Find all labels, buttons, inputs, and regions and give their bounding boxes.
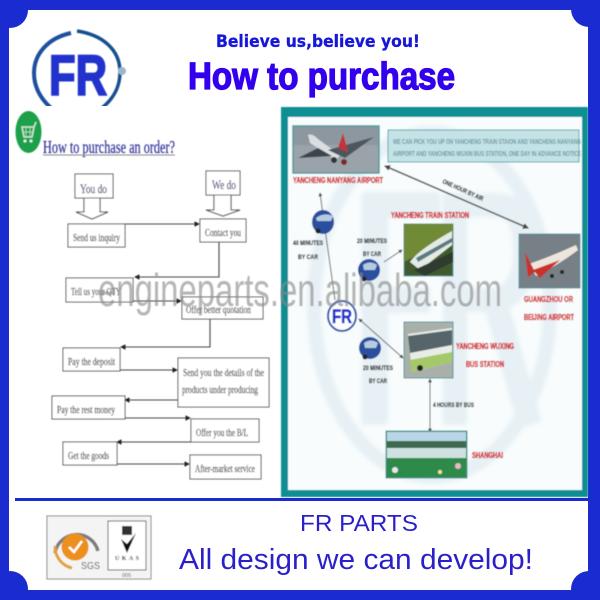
label: yancheng nanyang airport: YANCHENG NANYANG AIRPORT bbox=[293, 176, 383, 185]
label: guangzhou or beijing airport bbox=[524, 295, 574, 322]
icon: green cart bbox=[16, 111, 42, 153]
arrow: bus station to shanghai bbox=[429, 379, 431, 432]
box: you do: You do bbox=[80, 181, 107, 196]
label: 40 minutes by car bbox=[293, 240, 324, 261]
box: send us inquiry bbox=[68, 224, 125, 247]
label: 20 minutes by car bbox=[357, 238, 388, 258]
icon: car 3 bbox=[359, 337, 381, 360]
label: yancheng wuxing bus station: YANCHENG WUXING bbox=[456, 342, 514, 351]
label: 20 minutes by car bbox=[363, 365, 394, 385]
box: you do bbox=[75, 174, 113, 198]
flow lines and arrows bbox=[117, 224, 219, 464]
box: pay the rest money bbox=[52, 396, 125, 419]
photo: airplane, yancheng bbox=[293, 126, 379, 173]
certificates: SGS and UKAS bbox=[47, 516, 151, 579]
box: pay the deposit bbox=[63, 348, 120, 371]
box: tell us your qty: Tell us your QTY bbox=[71, 286, 121, 298]
label: 20 minutes by car: 20 MINUTES bbox=[363, 365, 394, 372]
panel: how to purchase an order flowchart bbox=[16, 111, 269, 479]
box: offer better quotation: Offer better quotation bbox=[186, 304, 251, 316]
box: get the goods: Get the goods bbox=[68, 450, 109, 462]
box: send details: products under producing bbox=[182, 384, 258, 396]
icon: car 2 bbox=[358, 259, 380, 282]
box: offer you the b/l bbox=[191, 419, 259, 442]
box: pay the deposit: Pay the deposit bbox=[68, 356, 115, 368]
callout: pick-up note bbox=[388, 130, 581, 162]
arrow: fr to bus station bbox=[359, 319, 403, 358]
hollow arrow: you do bbox=[76, 198, 108, 219]
box: after-market service: After-market service bbox=[195, 463, 255, 475]
heading: how to purchase an order: How to purchase an order? bbox=[43, 137, 175, 157]
label: 20 minutes by car: 20 MINUTES bbox=[357, 238, 388, 245]
watermark: large FR bbox=[314, 133, 550, 477]
label: yancheng wuxing bus station: BUS STATION bbox=[466, 360, 504, 369]
label: guangzhou or beijing airport: GUANGZHOU OR bbox=[524, 295, 573, 304]
icon: small FR logo bbox=[327, 301, 357, 331]
box: send details bbox=[178, 358, 269, 407]
label: 40 minutes by car: BY CAR bbox=[298, 254, 318, 261]
photo: bus bbox=[404, 322, 453, 378]
box: send details: Send you the details of the bbox=[183, 367, 264, 379]
logo: FR: FR bbox=[49, 44, 107, 108]
brand name: FR PARTS bbox=[300, 510, 418, 536]
title: How to purchase bbox=[188, 56, 455, 98]
label: 4 hours by bus: 4 HOURS BY BUS bbox=[433, 402, 474, 409]
divider bbox=[15, 498, 588, 501]
label: yancheng train station: YANCHENG TRAIN STATION bbox=[391, 211, 469, 220]
label: yancheng wuxing bus station bbox=[456, 342, 514, 369]
arrow: car to train bbox=[384, 250, 402, 262]
box: after-market service bbox=[190, 455, 261, 479]
arrow: airport to fr bbox=[320, 193, 335, 300]
badge: UKAS: UKAS bbox=[115, 556, 140, 562]
icon: car 1 bbox=[312, 210, 334, 234]
panel: route map bbox=[281, 107, 588, 497]
box: we do bbox=[206, 171, 240, 195]
photo: shanghai park bbox=[386, 431, 467, 478]
photo: train bbox=[404, 224, 453, 276]
label: 40 minutes by car: 40 MINUTES bbox=[293, 240, 324, 247]
icon: small FR logo: FR bbox=[332, 307, 352, 328]
box: contact you: Contact you bbox=[205, 227, 241, 239]
label: shanghai: SHANGHAI bbox=[472, 451, 503, 460]
badge: UKAS: 005 bbox=[122, 573, 131, 579]
label: 20 minutes by car: BY CAR bbox=[369, 378, 387, 385]
label: 20 minutes by car: BY CAR bbox=[363, 251, 381, 258]
hollow arrow: we do bbox=[206, 195, 240, 216]
box: pay the rest money: Pay the rest money bbox=[57, 404, 115, 416]
photo: airplane, guangzhou bbox=[519, 234, 580, 288]
box: send us inquiry: Send us inquiry bbox=[73, 232, 120, 244]
box: offer you the b/l: Offer you the B/L bbox=[196, 427, 248, 439]
label: guangzhou or beijing airport: BEIJING AIRPORT bbox=[524, 313, 574, 322]
box: get the goods bbox=[63, 442, 117, 465]
box: we do: We do bbox=[212, 177, 236, 192]
tagline: Believe us,believe you! bbox=[216, 32, 420, 51]
slogan: All design we can develop! bbox=[179, 544, 533, 576]
label: one hour by air: ONE HOUR BY AIR bbox=[441, 178, 484, 203]
heading: how to purchase an order bbox=[43, 137, 175, 157]
logo: FR bbox=[34, 31, 126, 108]
box: tell us your qty bbox=[66, 278, 133, 302]
box: contact you bbox=[200, 219, 246, 242]
badge: UKAS bbox=[108, 521, 146, 579]
arrow: one hour by air bbox=[385, 166, 528, 228]
badge: SGS: SGS bbox=[81, 561, 100, 572]
box: offer better quotation bbox=[182, 297, 263, 319]
